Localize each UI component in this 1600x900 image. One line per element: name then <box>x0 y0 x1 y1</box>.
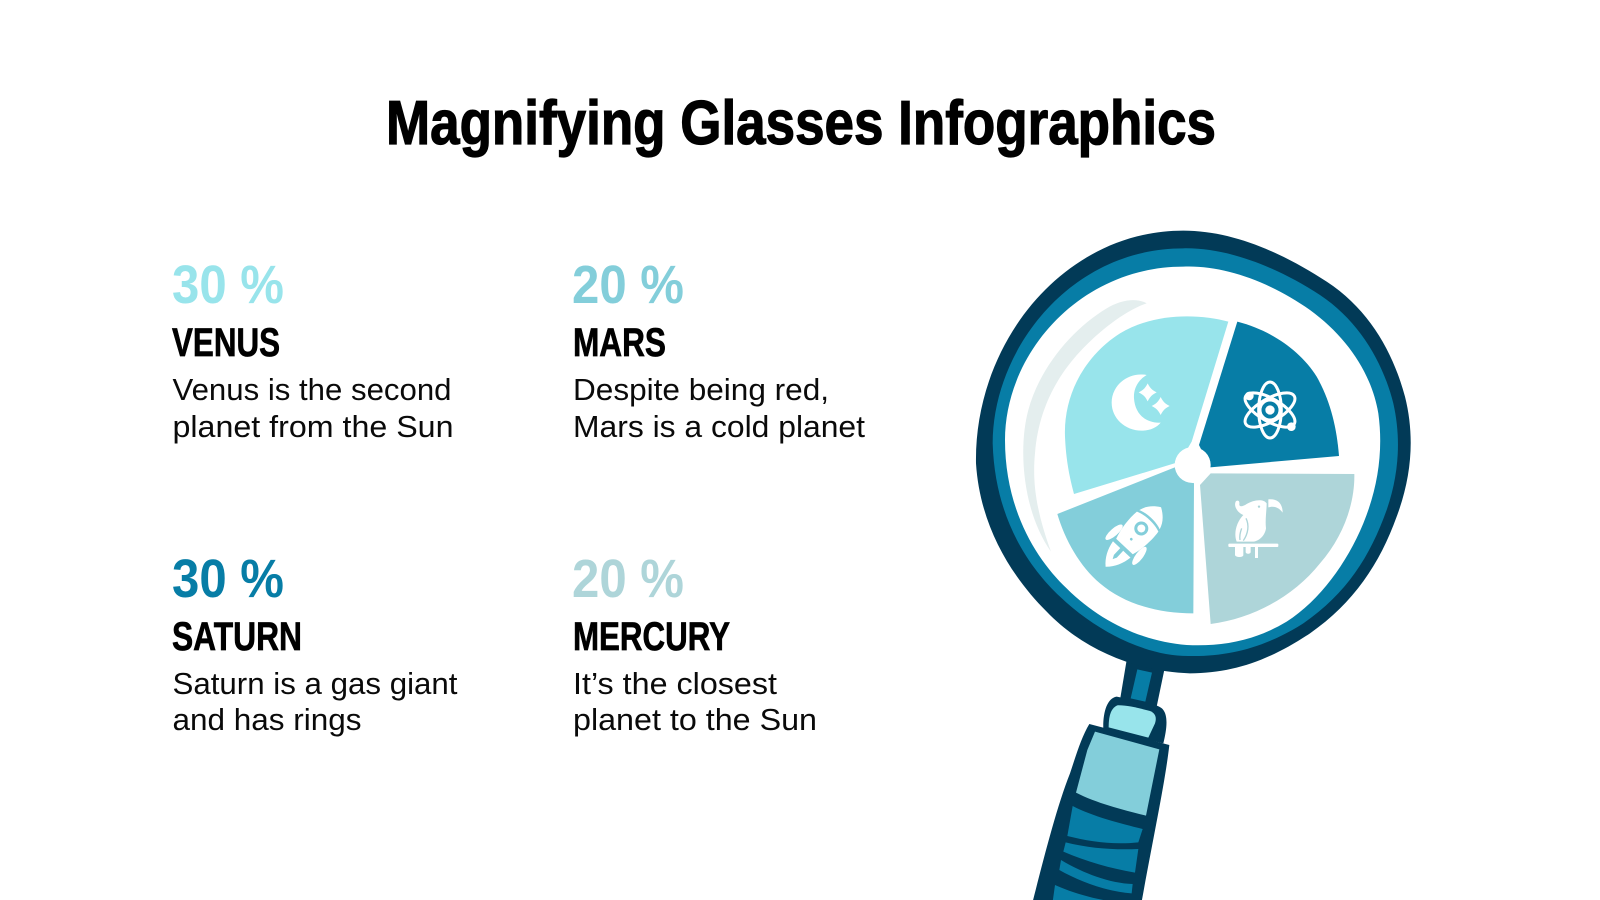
magnifying glass handle <box>1033 660 1169 900</box>
text block: saturn: and has rings <box>172 702 362 737</box>
title: Magnifying Glasses Infographics <box>386 89 1216 158</box>
text block: mercury: It’s the closest <box>573 666 777 701</box>
text block: venus: VENUS <box>172 321 280 365</box>
text block: mercury: 20 % <box>572 549 684 609</box>
text block: mars <box>572 255 865 444</box>
pie slice: mercury <box>1200 473 1354 624</box>
text block: mars: Mars is a cold planet <box>573 409 865 444</box>
text block: venus: Venus is the second <box>172 372 452 407</box>
icon: moon and stars <box>1112 374 1170 431</box>
text block: mars: Despite being red, <box>573 372 829 407</box>
text block: venus: 30 % <box>172 255 284 315</box>
icon: atom <box>1240 382 1300 438</box>
icon: rocket <box>1089 492 1177 582</box>
text block: saturn: 30 % <box>172 549 284 609</box>
pie slice: mars <box>1199 322 1339 467</box>
text block: mercury: MERCURY <box>573 615 730 659</box>
text block: saturn: SATURN <box>172 615 302 659</box>
text block: mercury: planet to the Sun <box>573 702 817 737</box>
pie slice: saturn <box>1057 467 1194 613</box>
text block: mars: MARS <box>573 321 666 365</box>
text block: venus <box>172 255 454 444</box>
icon: parrot <box>1228 499 1283 558</box>
pie slice: venus <box>1065 316 1228 494</box>
text block: venus: planet from the Sun <box>172 409 454 444</box>
text block: mars: 20 % <box>572 255 684 315</box>
text block: saturn: Saturn is a gas giant <box>172 666 458 701</box>
text block: saturn <box>172 549 458 737</box>
magnifying glass lens with pie chart <box>976 231 1411 673</box>
text block: mercury <box>572 549 817 737</box>
pie hub <box>1175 447 1211 483</box>
glass highlight <box>1023 300 1147 552</box>
